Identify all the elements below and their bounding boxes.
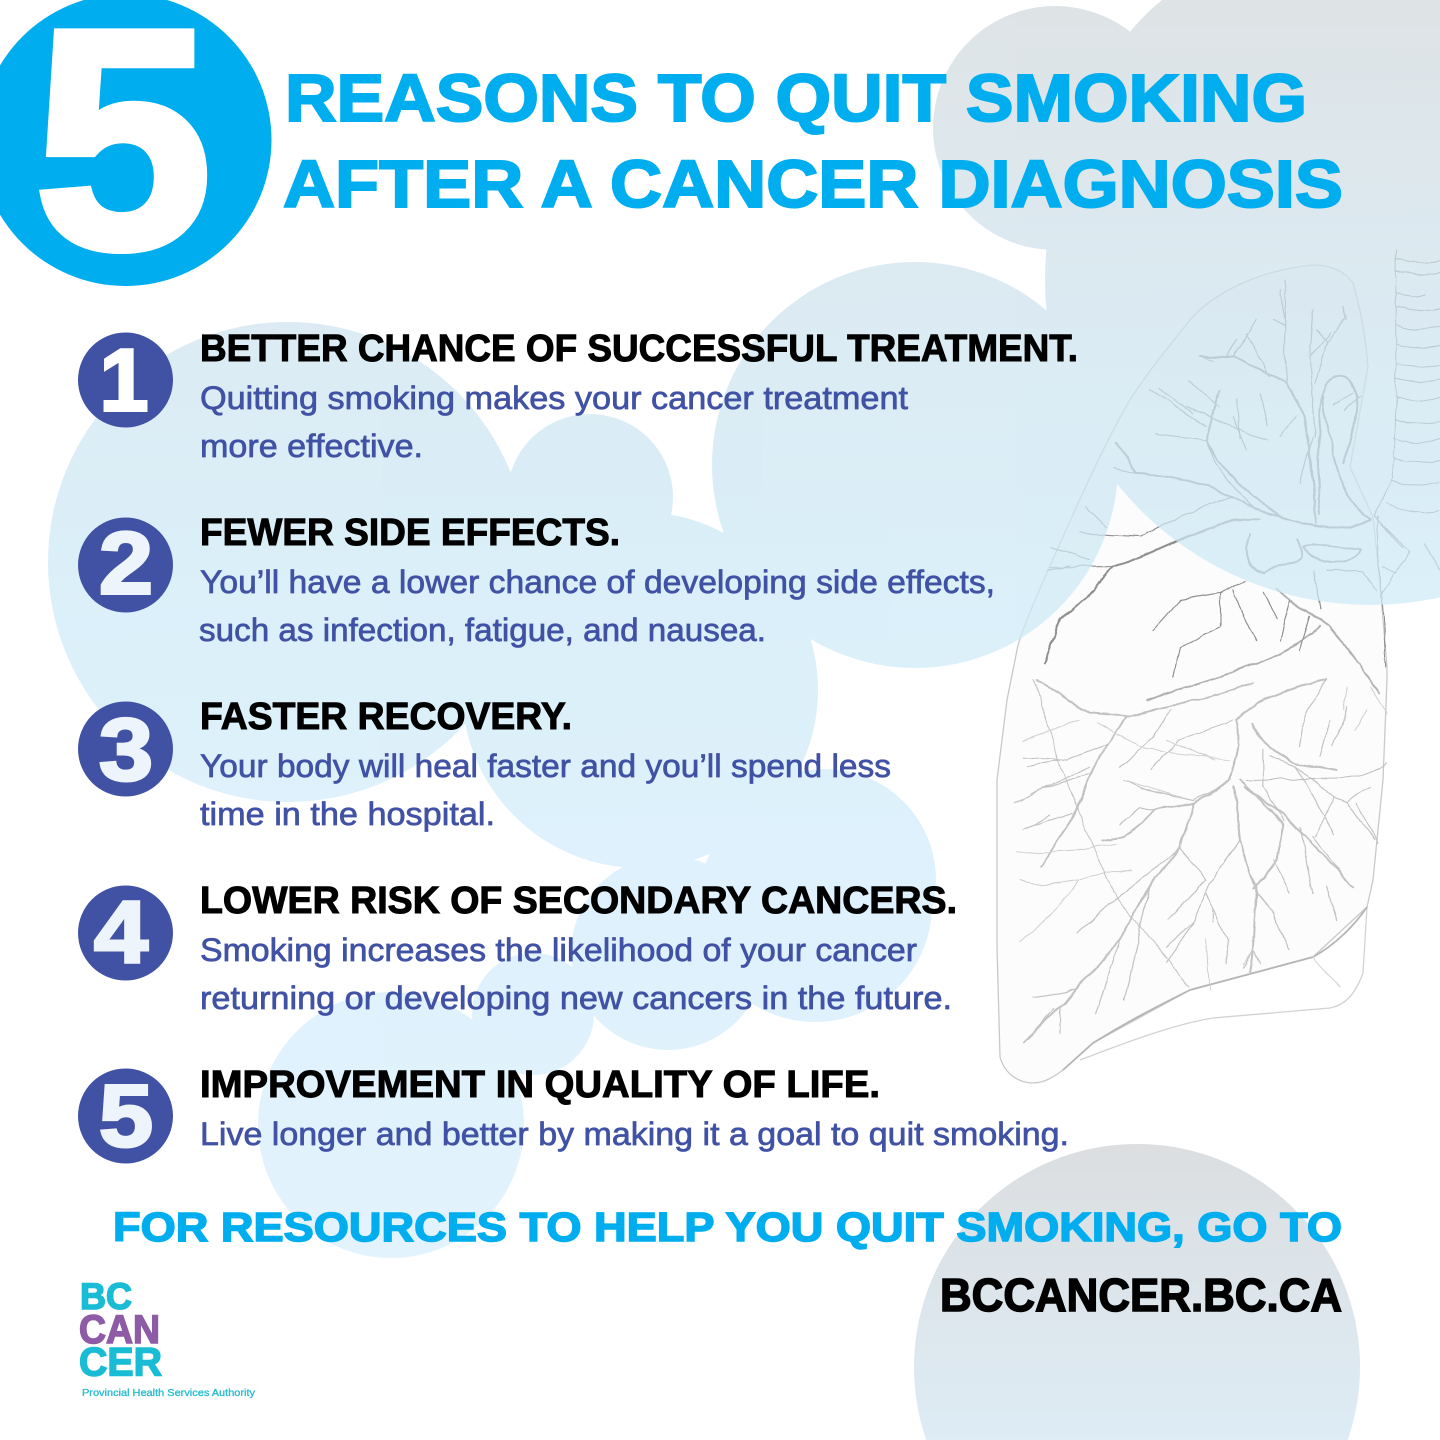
website url: BCCANCER.BC.CA <box>940 1269 1342 1321</box>
reason 4: LOWER RISK OF SECONDARY CANCERS. <box>200 880 957 922</box>
reason 1: BETTER CHANCE OF SUCCESSFUL TREATMENT. <box>200 328 1078 370</box>
number badge 2: 2 <box>99 514 153 612</box>
number badge 5 <box>78 1066 173 1165</box>
number badge 3 <box>78 700 173 799</box>
illustration: pencil drawing of lungs and trachea <box>997 250 1440 1083</box>
reason 3: time in the hospital. <box>200 796 495 832</box>
reason 3 <box>78 696 891 832</box>
reason 3: Your body will heal faster and you’ll spend less <box>200 748 891 784</box>
call to action: FOR RESOURCES TO HELP YOU QUIT SMOKING, GO TO <box>113 1204 1342 1250</box>
reason 4 <box>78 880 957 1016</box>
reason 5 <box>78 1064 1069 1165</box>
background: bottom right circle <box>914 1144 1360 1440</box>
illustration: upper lung branches and trachea <box>1043 250 1440 700</box>
logo: BC Cancer: Provincial Health Services Authority <box>82 1387 256 1399</box>
reason 5: IMPROVEMENT IN QUALITY OF LIFE. <box>200 1064 880 1106</box>
logo: BC Cancer: CER <box>79 1340 162 1384</box>
reason 1: Quitting smoking makes your cancer treatment <box>200 380 908 416</box>
reason 1: more effective. <box>200 428 423 464</box>
reason 4: Smoking increases the likelihood of your cancer <box>200 932 917 968</box>
number badge 2 <box>78 514 173 612</box>
reason 2: FEWER SIDE EFFECTS. <box>200 512 620 554</box>
number badge 1: 1 <box>100 330 148 430</box>
title: AFTER A CANCER DIAGNOSIS <box>283 147 1343 222</box>
reason 4: returning or developing new cancers in the future. <box>200 980 952 1016</box>
number badge 5: 5 <box>99 1066 153 1165</box>
logo: BC Cancer <box>79 1276 256 1399</box>
number badge 1 <box>78 330 173 430</box>
logo: BC Cancer: BC <box>80 1276 132 1317</box>
reason 5: Live longer and better by making it a goal to quit smoking. <box>200 1116 1069 1152</box>
logo: BC Cancer: CAN <box>79 1308 160 1352</box>
reason 2: such as infection, fatigue, and nausea. <box>199 612 766 648</box>
badge: big number 5 in blue circle <box>0 0 272 314</box>
reason 1 <box>78 328 1078 464</box>
number badge 3: 3 <box>99 700 153 799</box>
reason 2 <box>78 512 995 648</box>
reason 2: You’ll have a lower chance of developing side effects, <box>200 564 995 600</box>
title: REASONS TO QUIT SMOKING <box>285 61 1307 136</box>
number badge 4: 4 <box>94 882 148 982</box>
number badge 4 <box>78 882 173 982</box>
illustration: lower lung branches <box>1013 680 1387 1043</box>
title <box>283 61 1343 222</box>
reason 3: FASTER RECOVERY. <box>200 696 572 738</box>
